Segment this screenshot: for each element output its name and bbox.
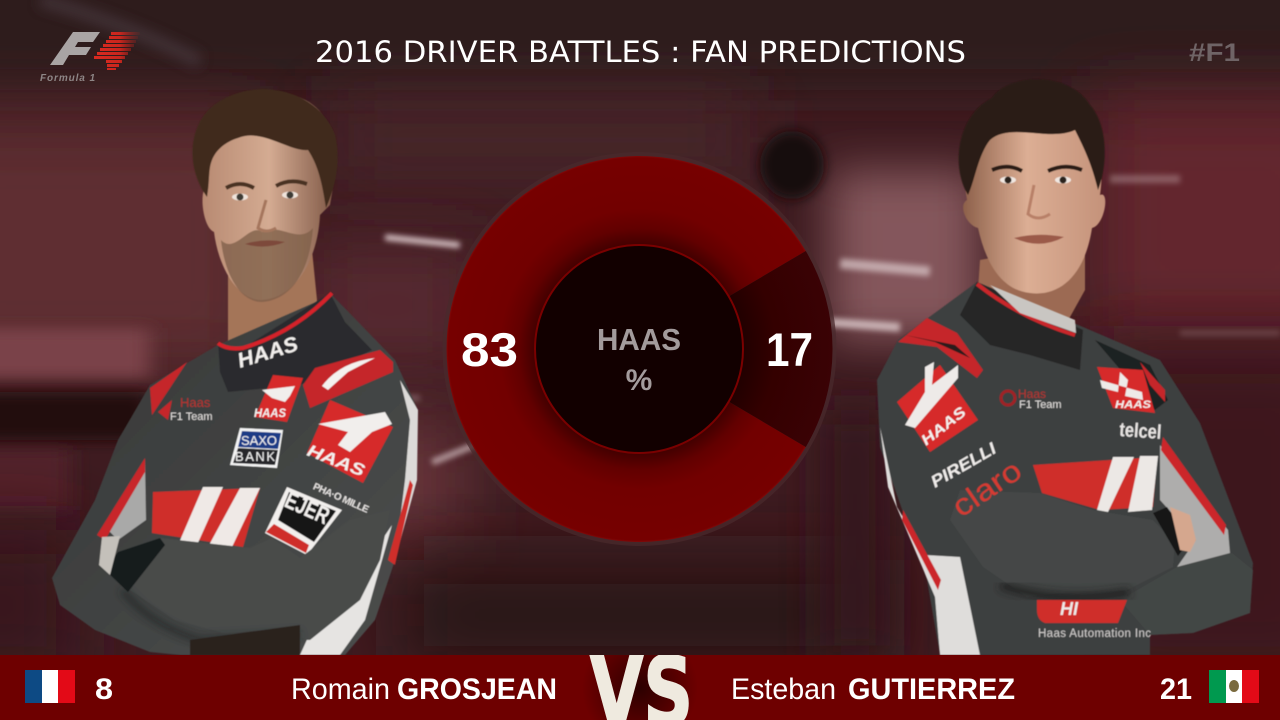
Haas F1 Team chest mark: F1 Team [1019,399,1062,411]
Claro sleeve mark: claro [946,454,1028,524]
chest H logo: HAAS [254,406,286,420]
sleeve H logo [897,362,978,452]
red speed stripes [94,32,140,70]
left shoulder patch [150,362,187,415]
right shoulder patch [303,350,393,408]
Beyer capital badge: EJER [281,487,334,530]
sleeve H logo [305,400,393,483]
Grosjean hair [193,89,338,208]
light streaks [370,175,1280,465]
driver: Esteban Gutierrez [877,79,1253,655]
crossed forearm [1166,535,1167,536]
name: Esteban Gutierrez: Esteban [731,673,836,706]
number: 21: 21 [1160,673,1192,706]
red chest band [1033,456,1158,512]
chest H logo [254,375,303,422]
right grey panel [1160,445,1230,567]
centre label: % [626,364,652,397]
name: Esteban Gutierrez: GUTIERREZ [848,673,1015,706]
name: Romain Grosjean [291,673,557,706]
chest H logo: HAAS [1115,399,1152,411]
left shoulder patch [898,318,983,378]
Gutierrez eyes, nose and mouth [992,167,1082,244]
telcel chest mark: telcel [1119,419,1162,444]
Gutierrez collar [960,282,1083,370]
Saxo Bank badge: SAXO [241,433,277,448]
segment: 17 percent [640,251,833,447]
chest H logo [1097,367,1155,413]
Grosjean suit body [52,293,418,655]
Saxo Bank badge: BANK [235,449,275,464]
sleeve H logo: HAAS [305,441,368,481]
Haas F1 Team chest mark: Haas [180,395,211,410]
title: 2016 DRIVER BATTLES : FAN PREDICTIONS [315,35,966,69]
donut centre [535,245,743,453]
icon: Formula 1 logo: Formula 1 [40,73,95,84]
Grosjean eyes, nose and mouth [226,181,307,247]
lower right arm [1120,553,1253,635]
red chest band [152,487,260,547]
sleeve H logo: HAAS [918,404,969,449]
Haas F1 Team chest mark: Haas [1018,387,1046,401]
left white side panel [880,427,980,655]
Grosjean beard [221,228,313,302]
HAAS collar logo: HAAS [235,333,301,373]
right shoulder strap [1095,340,1168,410]
segment: 83 percent [447,156,806,542]
Grosjean neck and head [193,89,338,350]
icon: French flag [25,670,75,703]
lower hand [190,625,300,655]
hashtag: #F1 [1189,39,1240,67]
forearm shadow [1000,585,1130,597]
centre label: HAAS [597,322,681,357]
glove [105,538,165,592]
icon: Mexican flag [1209,670,1259,703]
icon: Formula 1 logo [40,32,140,84]
forearm shadow lines [122,590,300,640]
name: Esteban Gutierrez [731,673,1015,706]
name: Romain Grosjean: GROSJEAN [397,673,557,706]
Saxo Bank badge [230,428,283,468]
Haas F1 Team chest mark [158,397,213,421]
Gutierrez suit body [877,282,1253,655]
Beyer capital badge [265,481,371,555]
name: Romain Grosjean: Romain [291,673,390,706]
Grosjean collar [218,293,372,392]
donut halo [442,152,836,546]
crossed forearm [132,535,386,640]
watch [99,536,120,575]
centre label [597,322,681,397]
lower chest logo: HI [1060,599,1079,619]
blurred car dark blob [760,131,824,199]
Beyer capital badge: PHA·O MILLE [311,481,371,516]
lower chest logo [1037,599,1151,640]
bottom bar [0,638,1280,720]
track streak: faint top left [40,0,200,62]
Haas F1 Team chest mark: F1 Team [170,411,213,423]
Gutierrez neck and head [959,79,1105,335]
value: 83: 83 [461,323,518,376]
value: 17: 17 [766,323,813,376]
cuff and hand [1153,507,1190,556]
Gutierrez hair [959,79,1105,195]
driver: Romain Grosjean [52,89,418,655]
Haas F1 Team chest mark [998,388,1062,409]
lower chest logo: Haas Automation Inc [1038,628,1151,640]
donut chart: Haas 83 / 17 [442,152,836,546]
Pirelli sleeve mark: PIRELLI [928,438,1001,491]
side panels [109,465,147,540]
number: 8: 8 [95,673,113,706]
